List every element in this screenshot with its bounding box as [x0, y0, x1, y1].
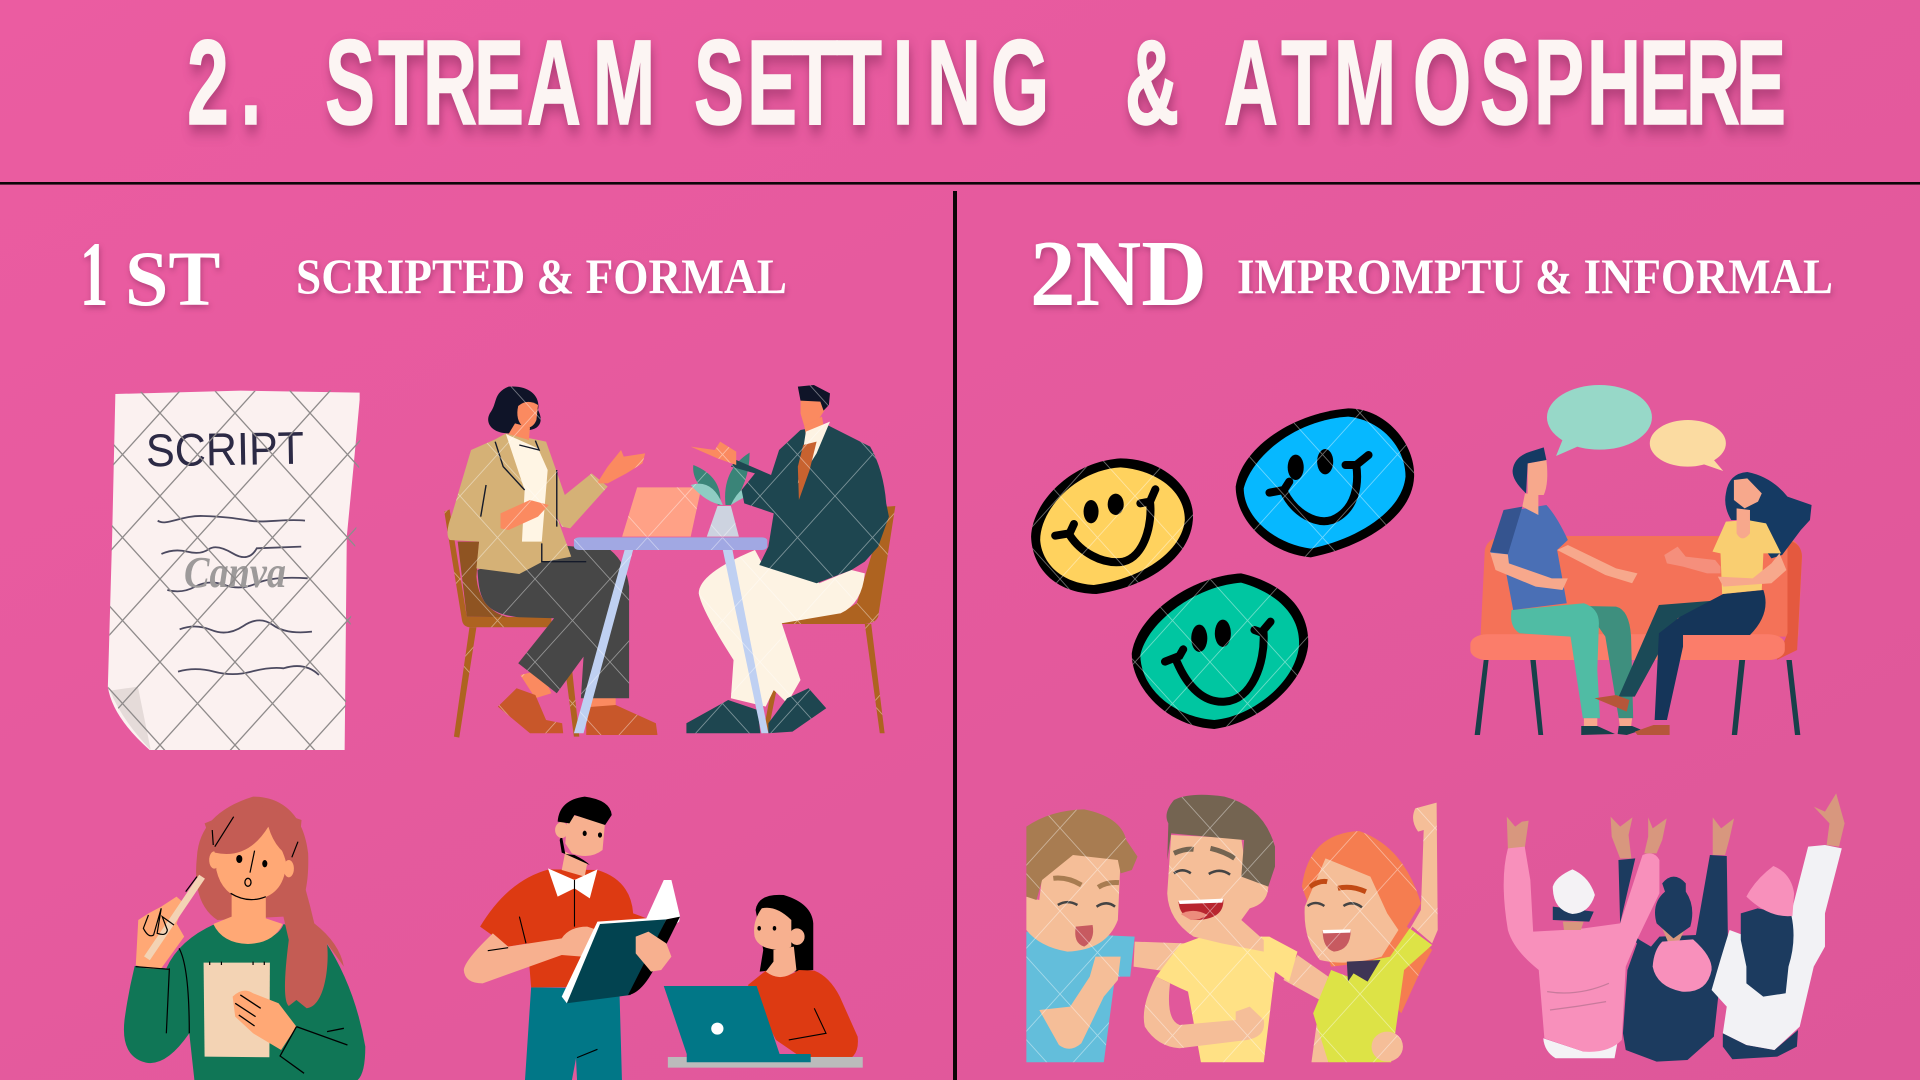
illustration: woman with notepad — [124, 797, 365, 1080]
man at the table — [686, 385, 889, 733]
illustration: three smiley faces — [1031, 408, 1414, 729]
woman's chair — [444, 509, 579, 738]
heading: first option — [80, 223, 787, 325]
person in white — [1712, 845, 1842, 1059]
woman — [1595, 472, 1812, 735]
ordinal digit: 1: 1 — [80, 223, 108, 325]
seated woman — [664, 895, 863, 1068]
table — [574, 537, 768, 733]
yellow smiley — [1031, 458, 1193, 594]
person in navy — [1618, 855, 1728, 1062]
handwritten word: script: SCRIPT — [146, 422, 304, 476]
vase and plant — [691, 453, 770, 537]
boy in blue shirt — [1026, 809, 1185, 1062]
illustration: three friends from behind with raised hands — [1504, 793, 1845, 1062]
speech bubbles — [1547, 385, 1726, 471]
illustration: couple chatting on a sofa — [1470, 385, 1812, 735]
illustration: script paper — [108, 390, 362, 750]
laptop — [622, 487, 701, 537]
illustration: formal meeting at a table — [444, 385, 896, 738]
man's chair — [763, 506, 895, 733]
woman at the table — [447, 387, 657, 735]
person in pink — [1504, 847, 1659, 1058]
green smiley — [1132, 573, 1308, 729]
girl with raised arm — [1302, 803, 1438, 1062]
raised hands — [1507, 793, 1845, 858]
title: 2. STREAM SETTING & ATMOSPHERE — [187, 16, 1786, 150]
blue smiley — [1236, 408, 1414, 557]
label: scripted and formal: SCRIPTED & FORMAL — [296, 248, 787, 304]
illustration: man reading a book and woman on laptop — [464, 797, 863, 1080]
standing man — [464, 797, 680, 1080]
sofa — [1470, 536, 1802, 735]
illustration: three laughing friends — [1020, 790, 1450, 1070]
ordinal suffix: ST: ST — [125, 235, 220, 322]
boy in yellow shirt — [1144, 795, 1328, 1062]
label: impromptu and informal: IMPROMPTU & INFORMAL — [1237, 248, 1833, 304]
ordinal: 2nd: 2ND — [1030, 222, 1207, 326]
paper sheet — [108, 391, 360, 750]
heading: second option — [1030, 222, 1833, 326]
man — [1490, 447, 1642, 735]
watermark word: Canva — [184, 548, 286, 597]
